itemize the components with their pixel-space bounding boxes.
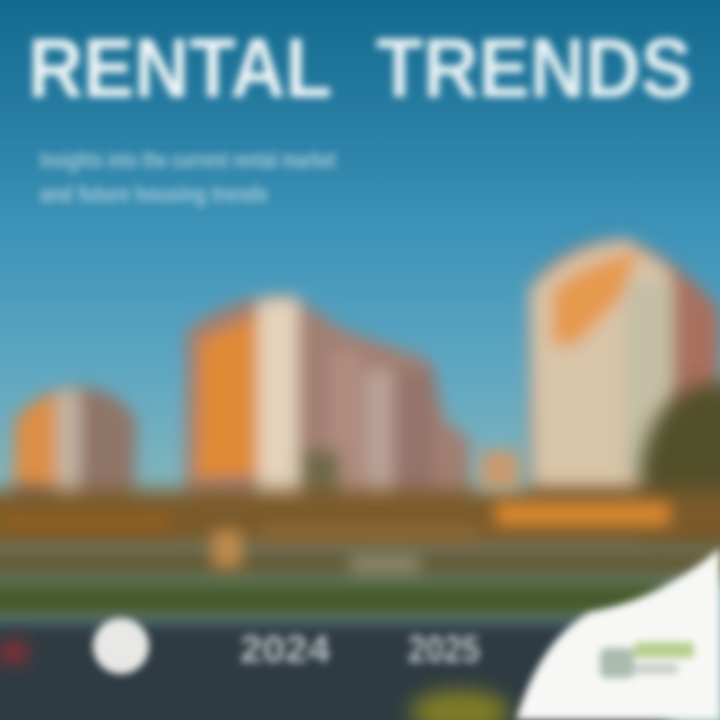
- building: left: [14, 386, 136, 520]
- logo: [600, 642, 694, 678]
- title: TRENDS: [376, 21, 692, 115]
- building: right: [528, 238, 720, 500]
- label: bottom stat two: 2025: [408, 629, 480, 671]
- trees on right: [640, 380, 720, 540]
- tree and street band: [0, 490, 720, 720]
- glowing street lights: [0, 450, 670, 664]
- white corner panel: [516, 548, 720, 720]
- subtitle text block: Insights into the current rental market: [40, 147, 336, 174]
- title: RENTAL: [28, 21, 332, 115]
- building: centre: [185, 294, 470, 520]
- label: bottom stat one: 2024: [240, 629, 330, 671]
- subtitle text block: [40, 147, 336, 208]
- title: [28, 21, 692, 115]
- icon: round badge: [93, 618, 149, 674]
- subtitle text block: and future housing trends: [40, 181, 268, 208]
- yellow accent at bottom: [410, 690, 510, 720]
